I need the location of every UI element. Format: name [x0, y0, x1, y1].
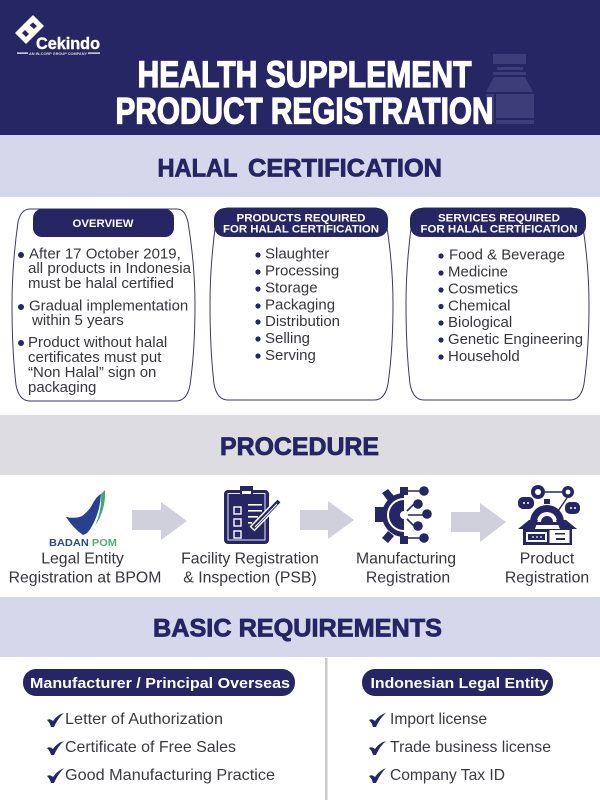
services list [438, 246, 583, 365]
section band: procedure [0, 415, 600, 475]
products list: Serving [265, 347, 316, 364]
icon: supplement bottle [486, 54, 534, 124]
section band: basic requirements [0, 597, 600, 657]
step: manufacturing registration [356, 486, 456, 586]
step: legal entity registration: Legal Entity [41, 550, 124, 568]
products list: Selling [265, 330, 310, 347]
step: facility registration: Facility Registration [181, 550, 319, 568]
icon: gear circuit [375, 486, 432, 544]
overview bullets: certificates must put [28, 349, 162, 366]
requirement list: Letter of Authorization [65, 711, 223, 728]
logo [16, 16, 100, 56]
products heading pill: PRODUCTS REQUIRED [236, 212, 366, 224]
arrow [132, 502, 187, 540]
products list [255, 246, 340, 364]
title [116, 53, 494, 132]
step: legal entity registration: Registration at BPOM [9, 570, 161, 586]
overview bullets: all products in Indonesia [28, 260, 192, 277]
icon: box with gear [518, 485, 580, 545]
products list: Packaging [265, 296, 335, 314]
services list: Biological [448, 314, 512, 331]
step: manufacturing registration: Registration [366, 570, 450, 586]
overview bullets: Product without halal [28, 334, 167, 351]
pill heading [362, 669, 553, 696]
requirement list [369, 711, 551, 784]
panel: indonesian legal entity [362, 669, 553, 784]
step: product registration: Registration [505, 570, 589, 586]
section band: basic requirements: BASIC REQUIREMENTS [153, 614, 442, 642]
overview bullets: “Non Halal” sign on [28, 364, 156, 381]
step: product registration [505, 485, 589, 586]
step: product registration: Product [520, 550, 575, 568]
overview heading pill: OVERVIEW [72, 218, 134, 230]
step: manufacturing registration: Manufacturing [356, 550, 456, 568]
panel: manufacturer / principal overseas [23, 669, 295, 784]
products list: Storage [265, 280, 318, 296]
panel: overview [12, 209, 195, 401]
products list: Slaughter [265, 246, 329, 262]
products heading pill [214, 208, 388, 237]
services list: Medicine [448, 264, 508, 280]
title: HEALTH SUPPLEMENT [138, 53, 472, 95]
overview heading pill [33, 209, 174, 237]
arrow [451, 503, 506, 542]
services heading pill: FOR HALAL CERTIFICATION [420, 224, 578, 236]
logo: Cekindo [36, 34, 100, 53]
logo: AN IN-CORP GROUP COMPANY [29, 51, 87, 56]
panel: products required [210, 208, 393, 400]
services list: Household [448, 348, 520, 365]
overview bullets: must be halal certified [28, 275, 174, 292]
arrow [300, 501, 354, 539]
requirement list: Good Manufacturing Practice [65, 767, 275, 784]
products list: Processing [265, 262, 339, 280]
requirement list: Company Tax ID [390, 767, 505, 784]
step: facility registration: & Inspection (PSB) [183, 570, 317, 586]
services list: Chemical [448, 298, 511, 314]
icon: Badan POM logo [49, 490, 117, 549]
overview bullets: After 17 October 2019, [29, 246, 181, 262]
overview bullets: within 5 years [31, 312, 124, 329]
section band: halal certification: CERTIFICATION [248, 154, 442, 182]
services heading pill: SERVICES REQUIRED [438, 212, 560, 224]
section band: halal certification: HALAL [158, 154, 238, 182]
icon: clipboard checklist [224, 486, 279, 544]
step: facility registration [181, 486, 319, 586]
header banner [0, 0, 600, 135]
products heading pill: FOR HALAL CERTIFICATION [223, 224, 379, 236]
requirement list: Import license [390, 711, 487, 728]
requirement list: Certificate of Free Sales [65, 739, 236, 756]
section band: procedure: PROCEDURE [220, 433, 379, 461]
overview bullets: Gradual implementation [29, 298, 188, 314]
overview bullets: packaging [28, 379, 96, 396]
icon: Badan POM logo: BADAN POM [49, 537, 117, 549]
services heading pill [410, 208, 586, 237]
title: PRODUCT REGISTRATION [116, 90, 494, 132]
step: legal entity registration [9, 490, 161, 586]
pill heading: Indonesian Legal Entity [370, 675, 549, 692]
column divider [325, 658, 328, 800]
pill heading: Manufacturer / Principal Overseas [30, 675, 290, 692]
panel: services required [406, 208, 589, 400]
products list: Distribution [265, 313, 340, 330]
services list: Genetic Engineering [448, 331, 583, 348]
section band: halal certification [0, 135, 600, 197]
overview bullets [18, 246, 192, 396]
pill heading [23, 669, 295, 696]
requirement list: Trade business license [390, 739, 551, 756]
services list: Food & Beverage [449, 246, 565, 264]
requirement list [47, 711, 275, 784]
services list: Cosmetics [448, 280, 518, 298]
